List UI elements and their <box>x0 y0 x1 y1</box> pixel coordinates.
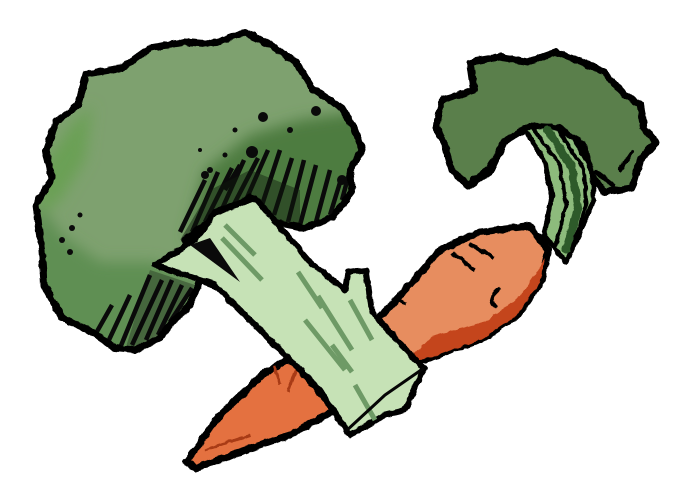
carrot lower tip <box>186 358 335 468</box>
broccoli dots <box>59 106 347 255</box>
broccoli head <box>32 29 366 354</box>
hatching <box>95 150 350 348</box>
carrot upper body <box>375 226 548 362</box>
broccoli stem <box>155 198 424 435</box>
carrot top greens <box>436 52 656 262</box>
broccoli shadow <box>38 108 358 346</box>
